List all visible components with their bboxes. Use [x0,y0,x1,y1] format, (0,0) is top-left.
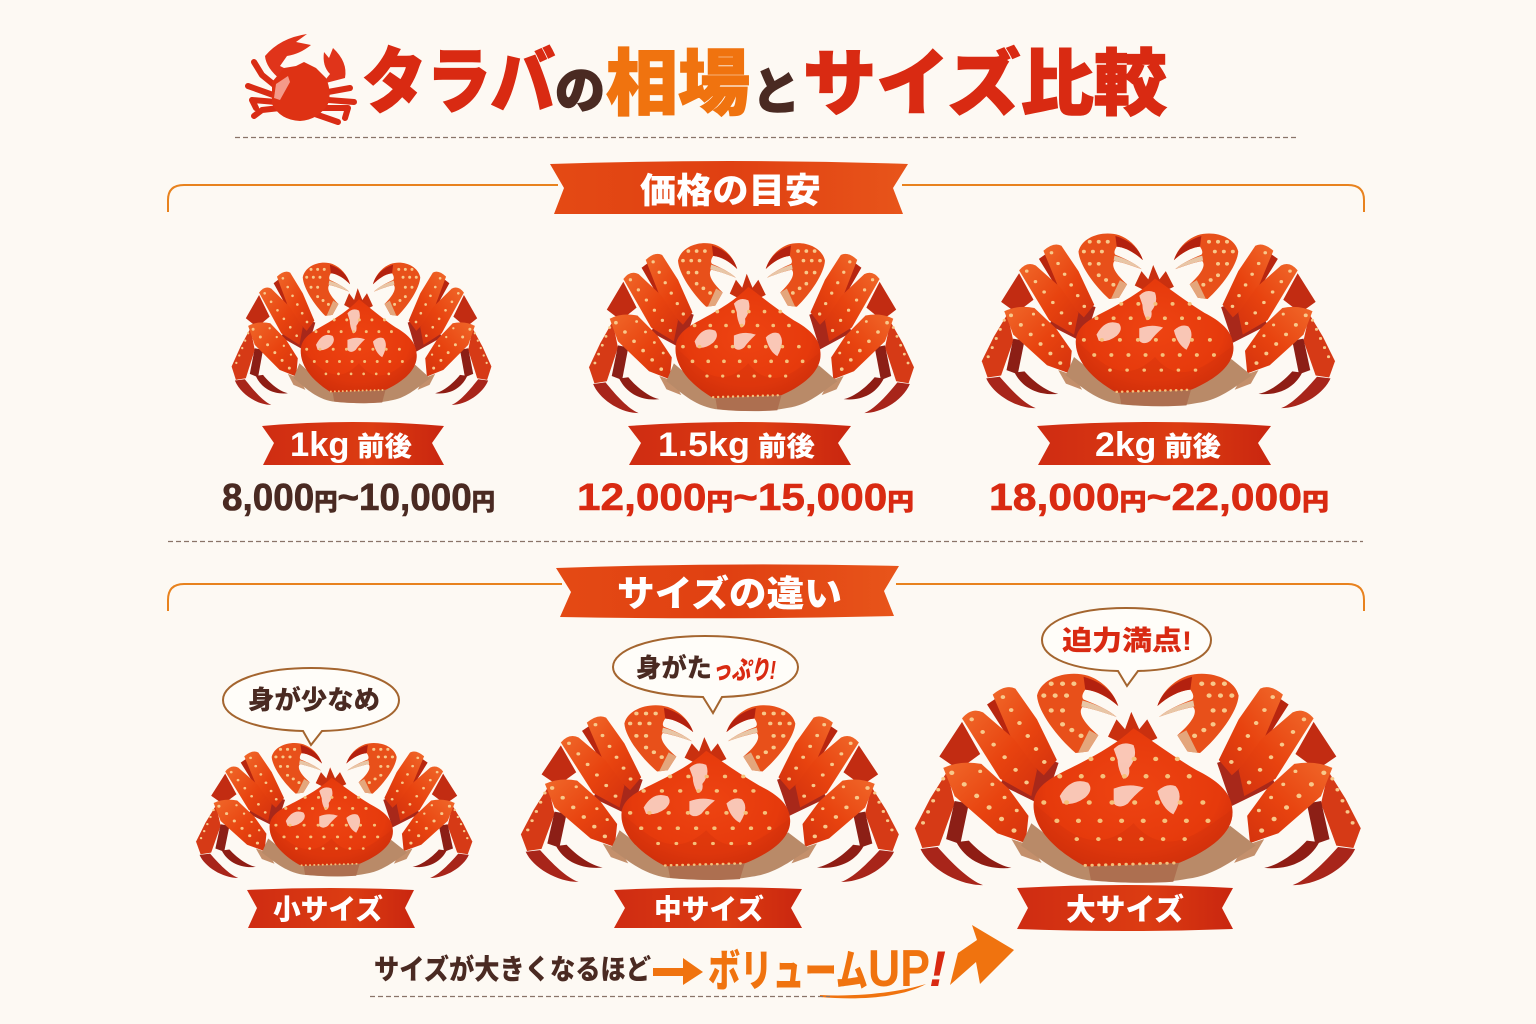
label: small: 小サイズ [273,893,383,925]
title: と [752,64,800,120]
title: の [555,63,605,119]
panel: price guide [168,161,1364,519]
heading ribbon: size difference: サイズの違い [617,573,842,614]
callout: medium: っぷり! [712,655,776,685]
arrow: large [950,925,1014,985]
label: large [1017,885,1233,931]
crab: 1kg [232,263,491,405]
crab: large [915,674,1361,885]
title: タラバ [362,43,555,123]
heading ribbon: price guide [550,161,908,214]
callout: small [223,668,399,745]
heading ribbon: size difference [556,564,899,618]
volume up text: ボリューム [708,947,868,996]
label: small [247,888,415,928]
label: large: 大サイズ [1066,893,1184,927]
callout: medium [613,636,798,713]
title: 相場 [606,45,750,125]
label: 1.5kg [628,422,851,465]
callout: small: 身が少なめ [248,685,380,715]
callout: medium: 身がた [636,653,712,683]
label: 1kg: 1kg 前後 [290,426,412,464]
crab: 2kg [982,234,1335,408]
title: サイズ比較 [803,45,1167,125]
icon: title crab [248,34,354,122]
arrow: small [653,958,703,985]
heading ribbon: price guide: 価格の目安 [640,172,821,211]
label: 2kg: 2kg 前後 [1095,426,1221,464]
caption: volume up [374,925,1014,998]
callout: large [1042,608,1211,686]
crab: small [196,743,472,878]
title [362,43,1167,125]
crab: 1.5kg [589,243,914,413]
volume up text: UP [868,940,930,998]
crab: medium [521,705,899,882]
underline swoosh [820,984,926,998]
callout: large: 迫力満点! [1062,626,1192,656]
label: 2kg [1037,422,1271,465]
price: 1kg: 8,000円~10,000円 [222,477,495,519]
price: 1.5kg: 12,000 円~15,000 円 [577,477,914,519]
label: 1kg [262,422,444,465]
caption: volume up: サイズが大きくなるほど [374,953,651,985]
label: medium: 中サイズ [654,893,764,925]
volume up text: ! [929,941,946,997]
label: medium [614,887,802,928]
price: 2kg: 18,000 円~22,000 円 [989,477,1329,519]
panel: size difference [168,564,1364,931]
label: 1.5kg: 1.5kg 前後 [658,426,815,464]
